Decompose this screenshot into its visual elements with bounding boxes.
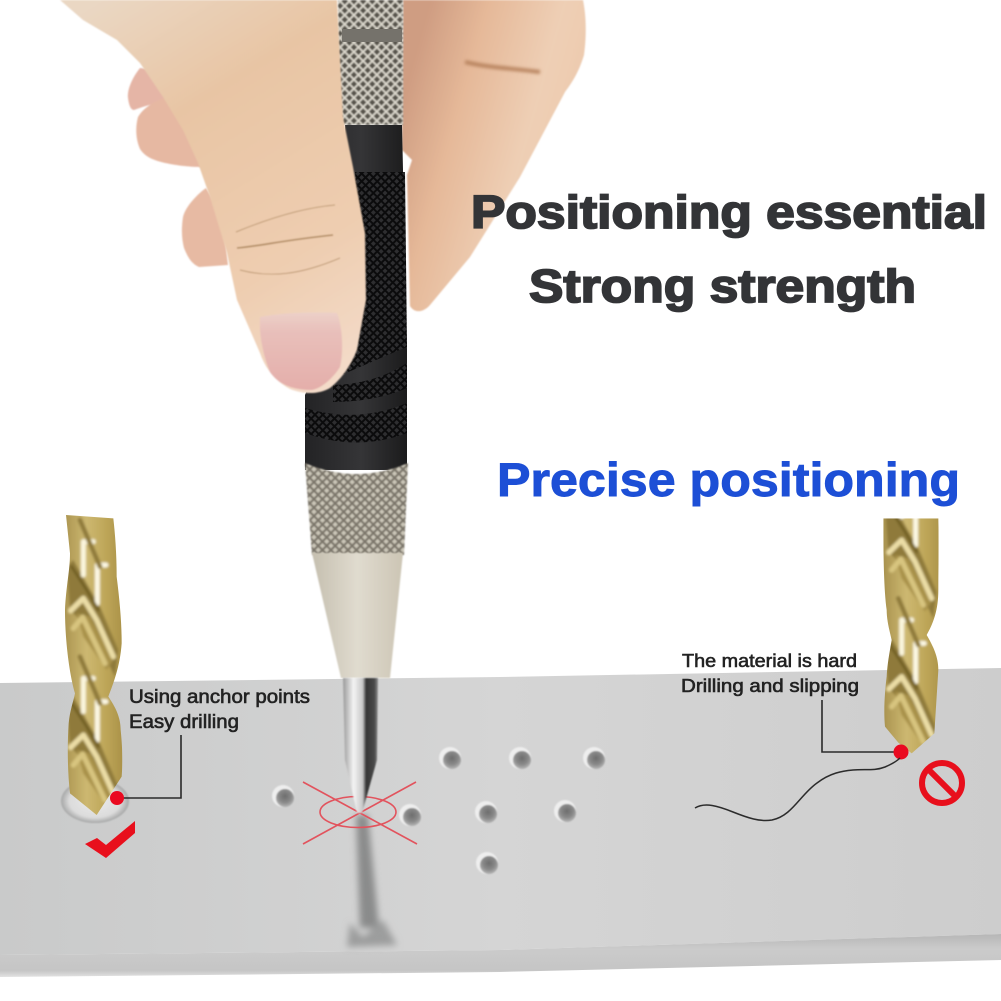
finger crease: [465, 62, 540, 72]
callout: using anchor points: Using anchor points: [129, 687, 310, 708]
back finger holding the tool: [402, 0, 586, 311]
heading: strong strength: Strong strength: [529, 260, 916, 312]
callout: using anchor points: Easy drilling: [129, 712, 239, 733]
thumb gripping the tool: [60, 0, 366, 393]
holes: punched anchor points: [272, 747, 605, 874]
tool body knurling: [330, 172, 407, 380]
curled fingers behind thumb: [128, 68, 228, 267]
icon: left drill bit: [65, 515, 122, 815]
heading: precise positioning: Precise positioning: [497, 453, 960, 506]
tool knurled band 2: [305, 403, 407, 442]
callout: using anchor points: [110, 687, 310, 805]
callout: material is hard: [681, 650, 908, 760]
heading: positioning essential: Positioning essential: [471, 186, 987, 238]
tool knurled band 1: [333, 363, 407, 402]
tool: automatic center punch: [305, 0, 408, 813]
left hole being drilled: [61, 779, 129, 823]
panel: metal plate: [0, 668, 1001, 977]
icon: prohibition sign: [922, 763, 962, 803]
tool steel shank: [343, 678, 378, 813]
gouge mark on plate: [347, 815, 397, 947]
thumb nail: [260, 312, 342, 390]
tool knurled upper grip: [338, 0, 403, 125]
callout: material is hard: Drilling and slipping: [681, 675, 859, 696]
tool collar ring: [342, 29, 402, 42]
callout: material is hard: The material is hard: [682, 650, 857, 671]
red target cross: [303, 782, 417, 844]
icon: right drill bit: [883, 518, 939, 754]
tool black body: [305, 125, 407, 470]
icon: red check mark: [85, 821, 135, 858]
thumb knuckle creases: [236, 205, 340, 274]
tool beige cone: [312, 553, 403, 678]
drill slip scratch line: [695, 758, 900, 821]
tool knurled silver collar: [305, 463, 408, 555]
